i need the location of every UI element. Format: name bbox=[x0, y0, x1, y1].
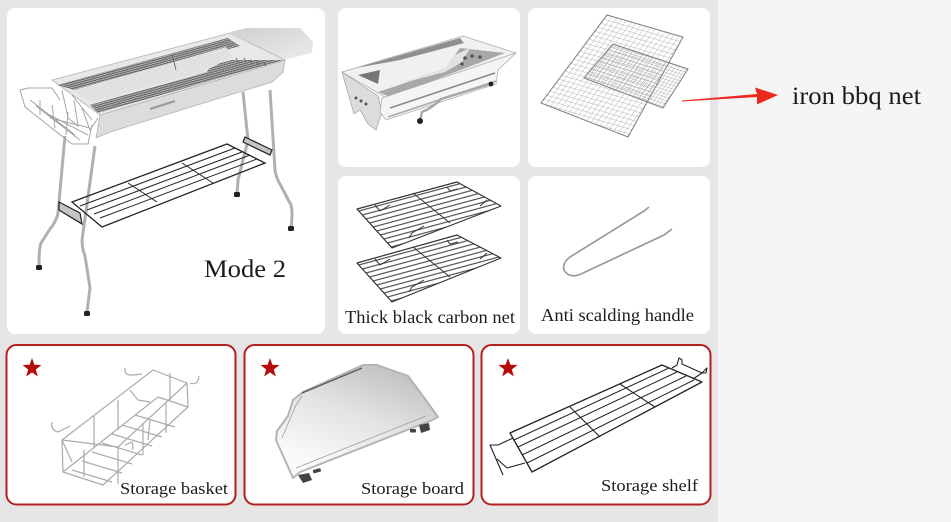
icon: side board bbox=[230, 28, 313, 60]
icon: star bbox=[260, 358, 280, 376]
panel: storage basket bbox=[6, 345, 236, 504]
panel: iron bbq net bbox=[528, 8, 710, 167]
icon: leg feet bbox=[36, 192, 294, 316]
icon: star bbox=[498, 358, 518, 376]
icon: board clips bbox=[298, 423, 430, 483]
icon: tray vents bbox=[354, 54, 482, 106]
icon: grate dark strips bbox=[57, 38, 283, 113]
icon: steel board bbox=[276, 365, 438, 478]
panel: storage board bbox=[244, 345, 474, 504]
icon: tongs handle bbox=[564, 207, 672, 276]
icon: tray rod bbox=[420, 84, 490, 121]
panel: thick black carbon net bbox=[338, 176, 520, 334]
icon: tray side plate and legs bbox=[342, 72, 382, 130]
icon: grate light centre band bbox=[74, 47, 232, 103]
panel: anti scalding handle bbox=[528, 176, 710, 334]
icon: black lower shelf bbox=[59, 137, 272, 227]
icon: star bbox=[22, 358, 42, 376]
panel: storage shelf bbox=[482, 345, 710, 504]
icon: tray interior bbox=[342, 36, 516, 100]
label: Storage board: Storage board bbox=[361, 479, 465, 498]
label: Anti scalding handle: Anti scalding handle bbox=[541, 305, 694, 325]
icon: tray front wall bbox=[380, 53, 516, 120]
icon: tray body bbox=[96, 60, 285, 138]
label: Storage shelf: Storage shelf bbox=[601, 476, 698, 495]
icon: upper carbon net bbox=[357, 182, 501, 248]
icon: small mesh net bbox=[584, 44, 688, 108]
panel: mode 2 grill bbox=[7, 8, 325, 334]
label: Mode 2: Mode 2 bbox=[204, 256, 286, 283]
label: Thick black carbon net: Thick black carbon net bbox=[345, 307, 515, 327]
gray background area bbox=[0, 0, 718, 522]
arrow bbox=[682, 88, 778, 104]
panel: open grill tray bbox=[338, 8, 520, 167]
icon: large mesh net bbox=[541, 15, 683, 137]
icon: grill legs bbox=[39, 90, 292, 312]
icon: wire basket bbox=[52, 368, 199, 485]
label: iron bbq net: iron bbq net bbox=[792, 83, 921, 110]
icon: left hanging basket bbox=[20, 88, 98, 144]
icon: black wire shelf bbox=[490, 358, 707, 475]
label: Storage basket: Storage basket bbox=[120, 479, 228, 498]
icon: lower carbon net bbox=[357, 235, 501, 302]
